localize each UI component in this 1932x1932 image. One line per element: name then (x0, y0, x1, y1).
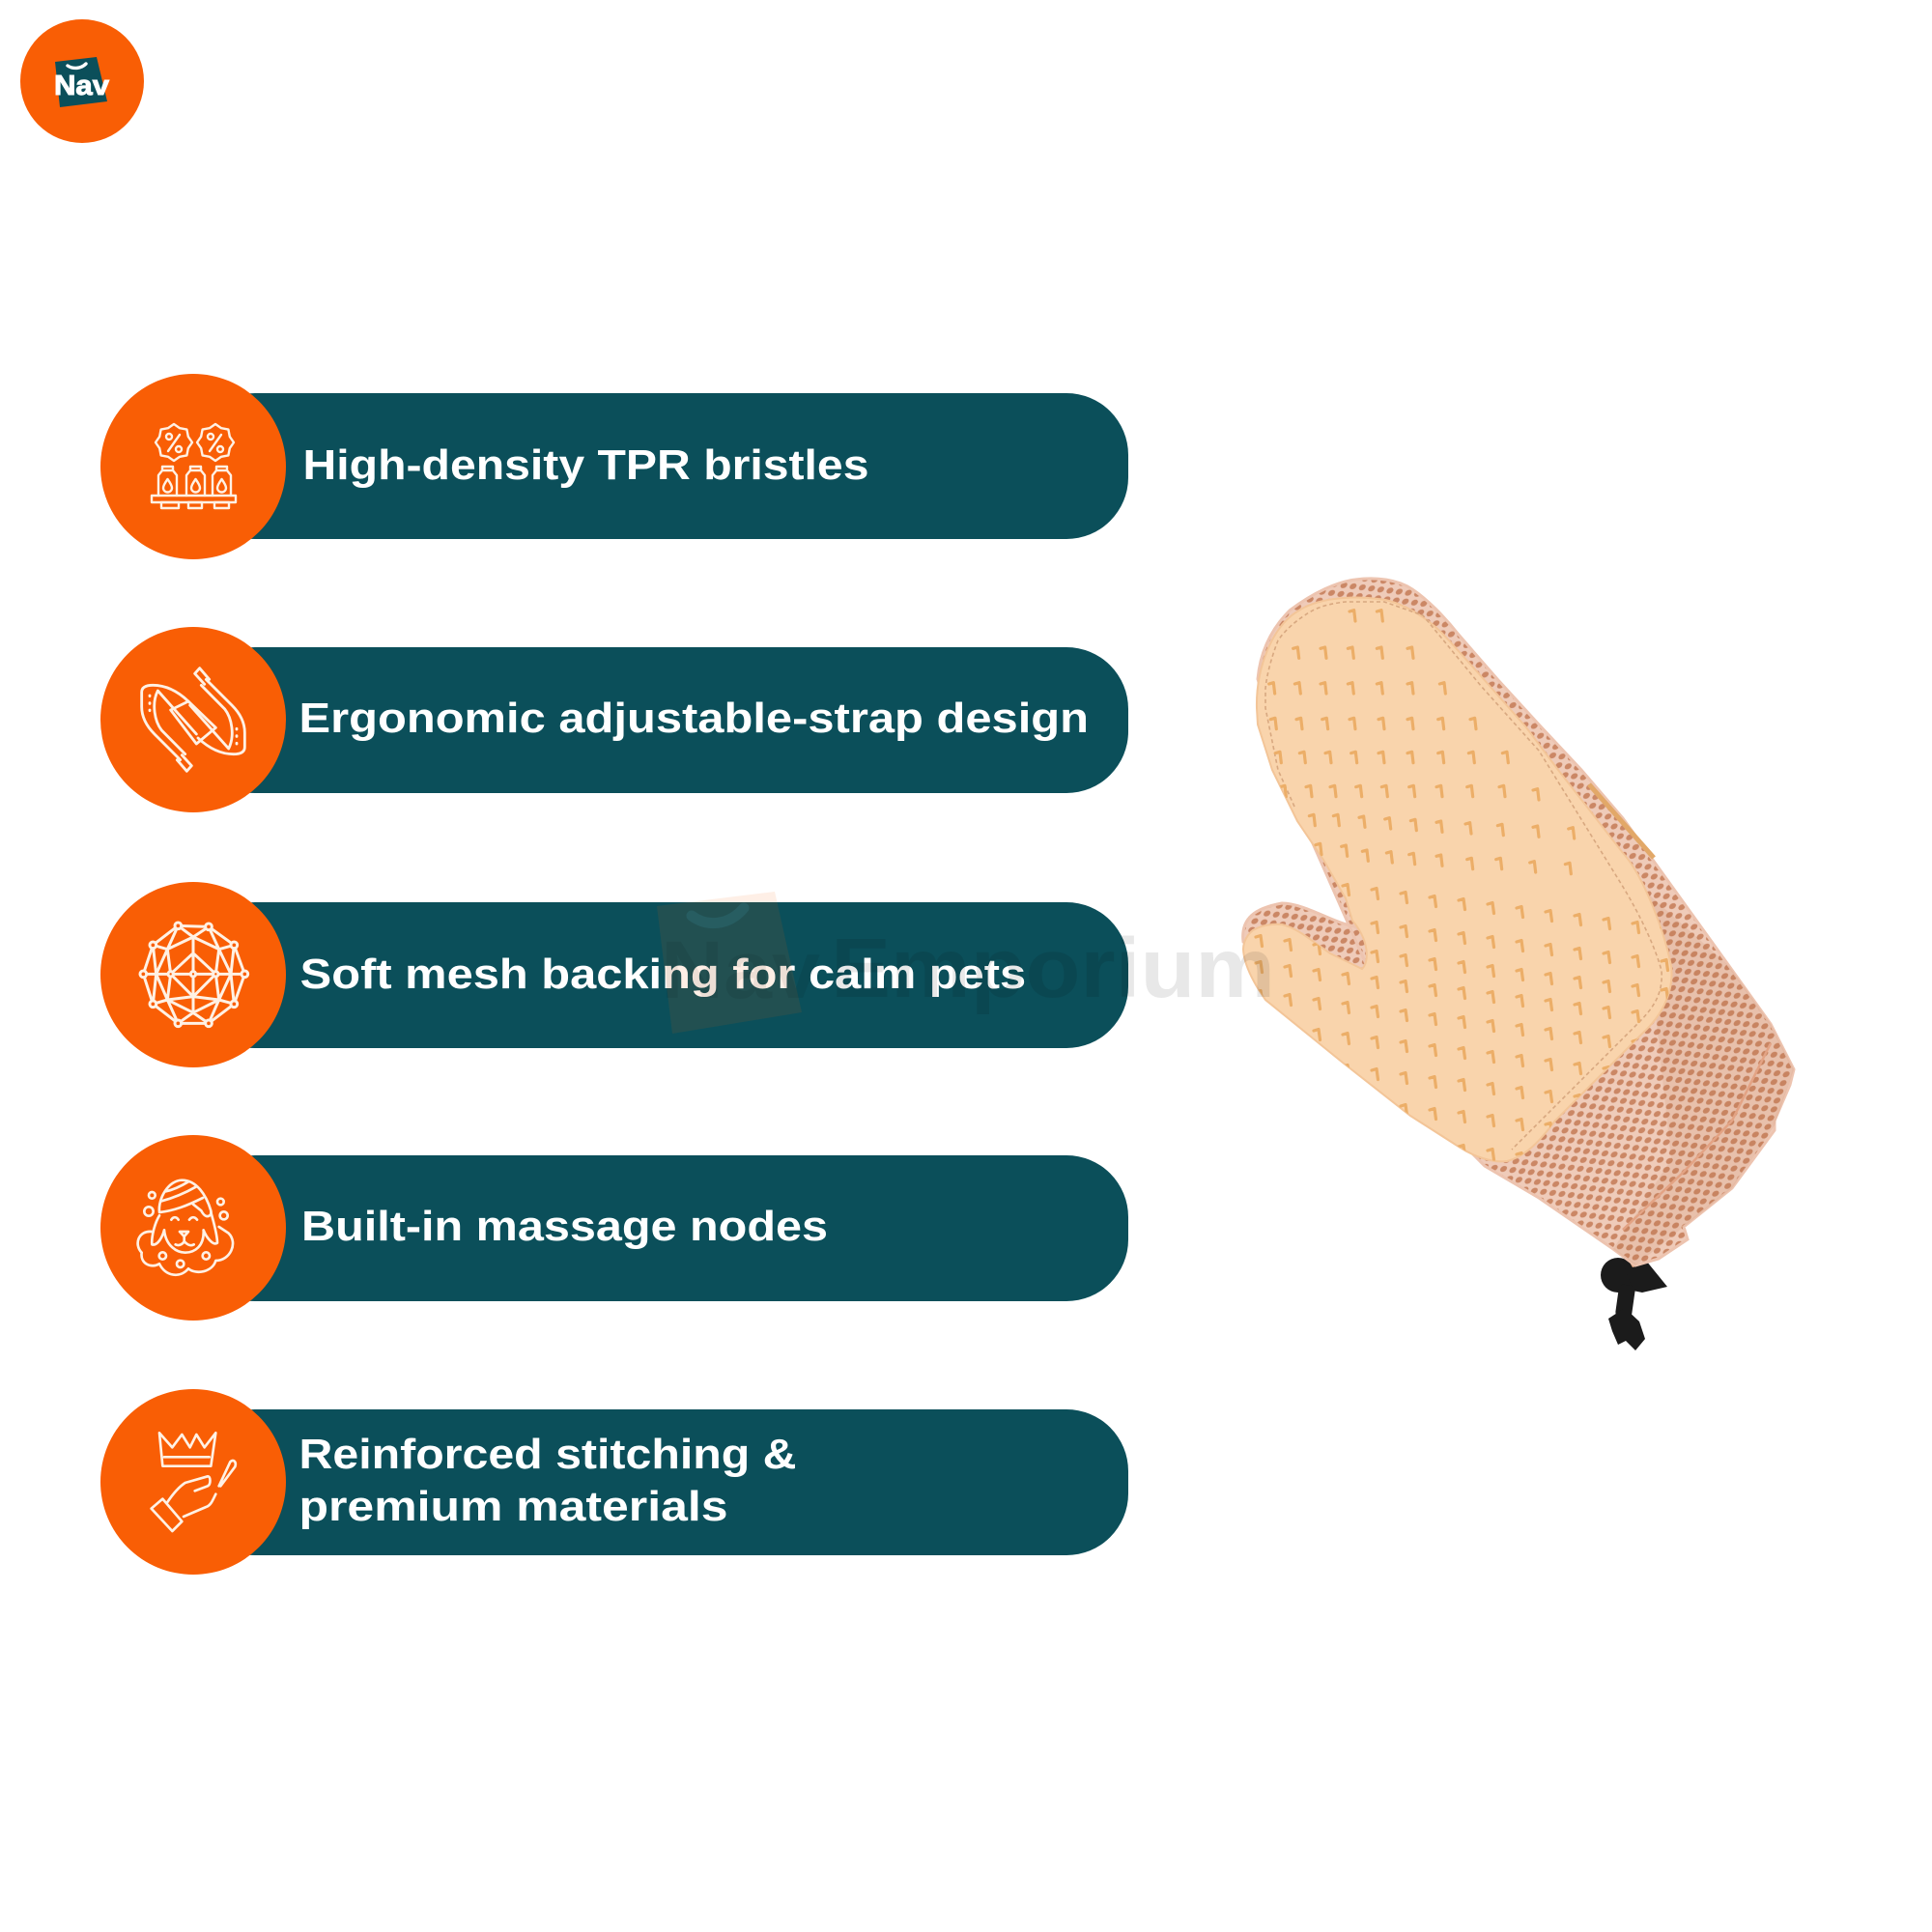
product photo: grooming glove (1227, 579, 1794, 1350)
watermark: Nav Emporium: Nav (661, 924, 820, 1015)
label: bristles: High-density TPR bristles (303, 441, 869, 489)
glove side strip (1589, 784, 1654, 858)
watermark: Nav Emporium: Emporium (831, 922, 1275, 1015)
glove drawstring toggle (1601, 1256, 1667, 1350)
glove cuff tab (1623, 1222, 1689, 1267)
logo badge (20, 19, 144, 143)
label: stitching: premium materials (299, 1483, 728, 1530)
icon: geodesic mesh (140, 923, 248, 1027)
glove stitching (1265, 602, 1662, 1150)
icon: dog with towel and foam (138, 1180, 233, 1275)
watermark: Nav Emporium (657, 892, 1275, 1034)
feature row: massage (100, 1135, 1128, 1321)
feature row: strap (100, 627, 1128, 812)
icon: adjustable straps (142, 668, 244, 771)
logo badge: Nav (54, 71, 109, 101)
label: strap: Ergonomic adjustable-strap design (299, 695, 1089, 742)
glove cuff shading (1613, 889, 1794, 1265)
glove rubber sole (1243, 598, 1671, 1161)
icon: crown over hand (152, 1433, 236, 1531)
feature row: stitching (100, 1389, 1128, 1575)
glove mesh backing (1243, 579, 1794, 1265)
feature row: mesh (100, 882, 1128, 1067)
feature row: bristles (100, 374, 1128, 559)
label: stitching: Reinforced stitching & (299, 1431, 796, 1478)
glove bristles (1227, 611, 1667, 1182)
icon: bottles and discount badges (152, 424, 236, 508)
label: mesh: Soft mesh backing for calm pets (300, 951, 1026, 998)
label: massage: Built-in massage nodes (301, 1203, 828, 1250)
glove cuff seam (1623, 1043, 1771, 1230)
